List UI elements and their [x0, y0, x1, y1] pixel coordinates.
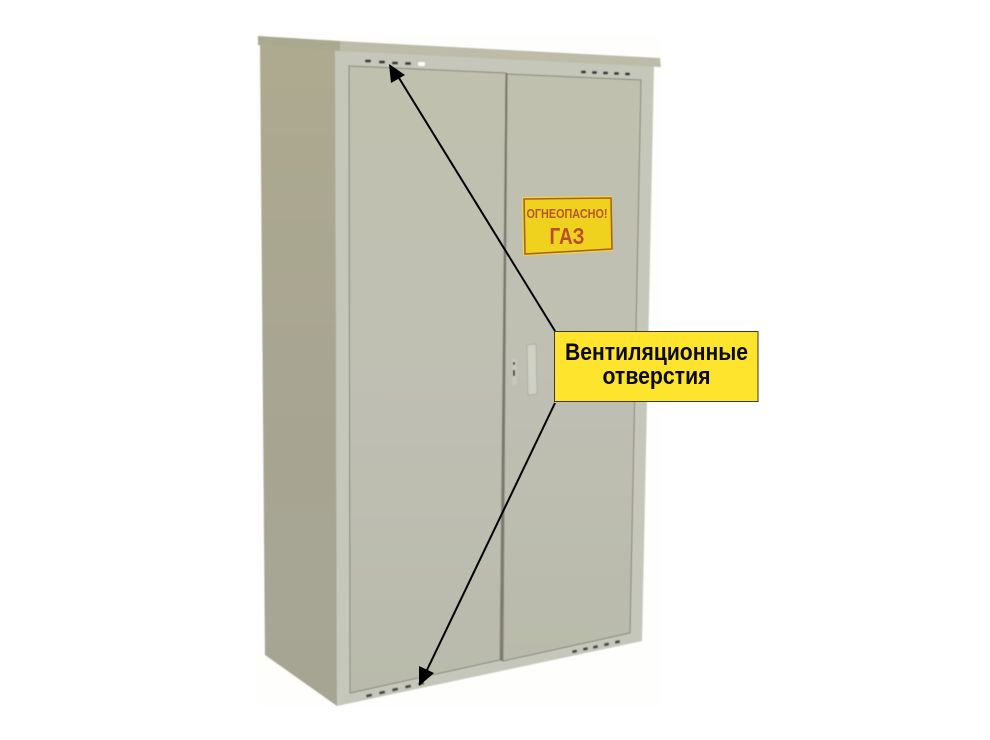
front frame: [335, 50, 654, 706]
vent slots: bottom right: [572, 640, 620, 653]
warning sign: ГАЗ: [550, 223, 584, 249]
callout: ventilation openings: отверстия: [602, 363, 710, 390]
warning sign: ОГНЕОПАСНО!: [526, 206, 608, 221]
door gap: [502, 73, 506, 661]
vent slots: bottom left: [366, 681, 424, 698]
warning sign: [522, 196, 613, 256]
door handle: [512, 344, 537, 395]
right door: [503, 74, 641, 661]
photo background: [257, 34, 662, 706]
callout: ventilation openings: [554, 332, 758, 402]
arrow: to bottom vents: [419, 403, 555, 686]
arrow: to top vents: [389, 64, 555, 331]
light spot on frame: [418, 62, 425, 66]
vent slots: top right: [581, 70, 630, 76]
vent slots: top left: [365, 60, 411, 65]
side panel: [260, 45, 337, 706]
callout: ventilation openings: Вентиляционные: [565, 339, 748, 366]
left door: [349, 66, 506, 693]
roof: [258, 36, 661, 67]
cabinet: [258, 36, 661, 706]
